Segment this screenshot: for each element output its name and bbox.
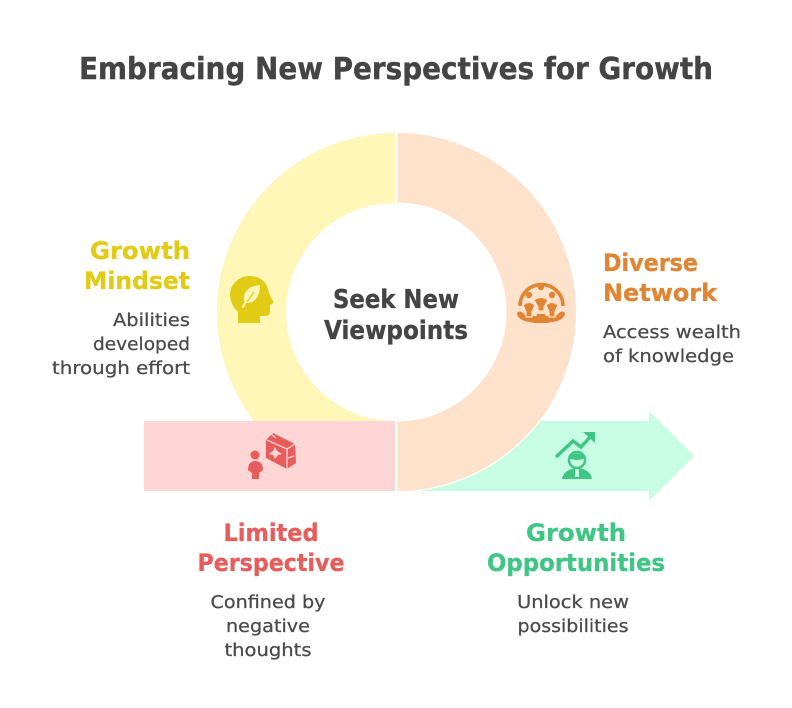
label: growth mindset: developed: [93, 334, 190, 355]
label: limited perspective: Confined by: [210, 592, 326, 613]
arrow: growth opportunities band: [396, 411, 694, 501]
label: growth opportunities: [487, 519, 665, 637]
ring segment: diverse network: [397, 132, 576, 492]
label: diverse network: of knowledge: [603, 346, 734, 367]
label: growth mindset: Abilities: [113, 310, 190, 331]
label: growth opportunities: Unlock new: [517, 592, 629, 613]
label: diverse network: Access wealth: [603, 322, 741, 343]
center label: [324, 285, 468, 346]
label: growth mindset: through effort: [52, 358, 190, 379]
label: growth opportunities: Growth: [526, 519, 626, 547]
label: limited perspective: [198, 519, 344, 661]
band: limited perspective: [144, 421, 395, 491]
label: limited perspective: Perspective: [198, 549, 344, 577]
label: growth mindset: Growth: [90, 237, 190, 265]
icon: person with rising chart: [557, 432, 595, 479]
label: diverse network: [603, 249, 741, 367]
label: growth opportunities: Opportunities: [487, 549, 665, 577]
icon: person with broken box: [248, 433, 296, 479]
label: growth mindset: [52, 237, 190, 379]
label: limited perspective: negative: [226, 616, 310, 637]
label: growth opportunities: possibilities: [518, 616, 628, 637]
label: diverse network: Diverse: [603, 249, 698, 277]
center label: Seek New: [333, 285, 459, 315]
center label: Viewpoints: [324, 316, 468, 346]
icon: head with leaf: [230, 276, 273, 323]
label: limited perspective: Limited: [224, 519, 318, 547]
icon: group of people in dome: [517, 284, 565, 323]
label: limited perspective: thoughts: [224, 640, 312, 661]
ring segment: growth mindset: [217, 133, 395, 421]
title: Embracing New Perspectives for Growth: [79, 52, 713, 87]
label: diverse network: Network: [603, 279, 718, 307]
label: growth mindset: Mindset: [84, 267, 190, 295]
